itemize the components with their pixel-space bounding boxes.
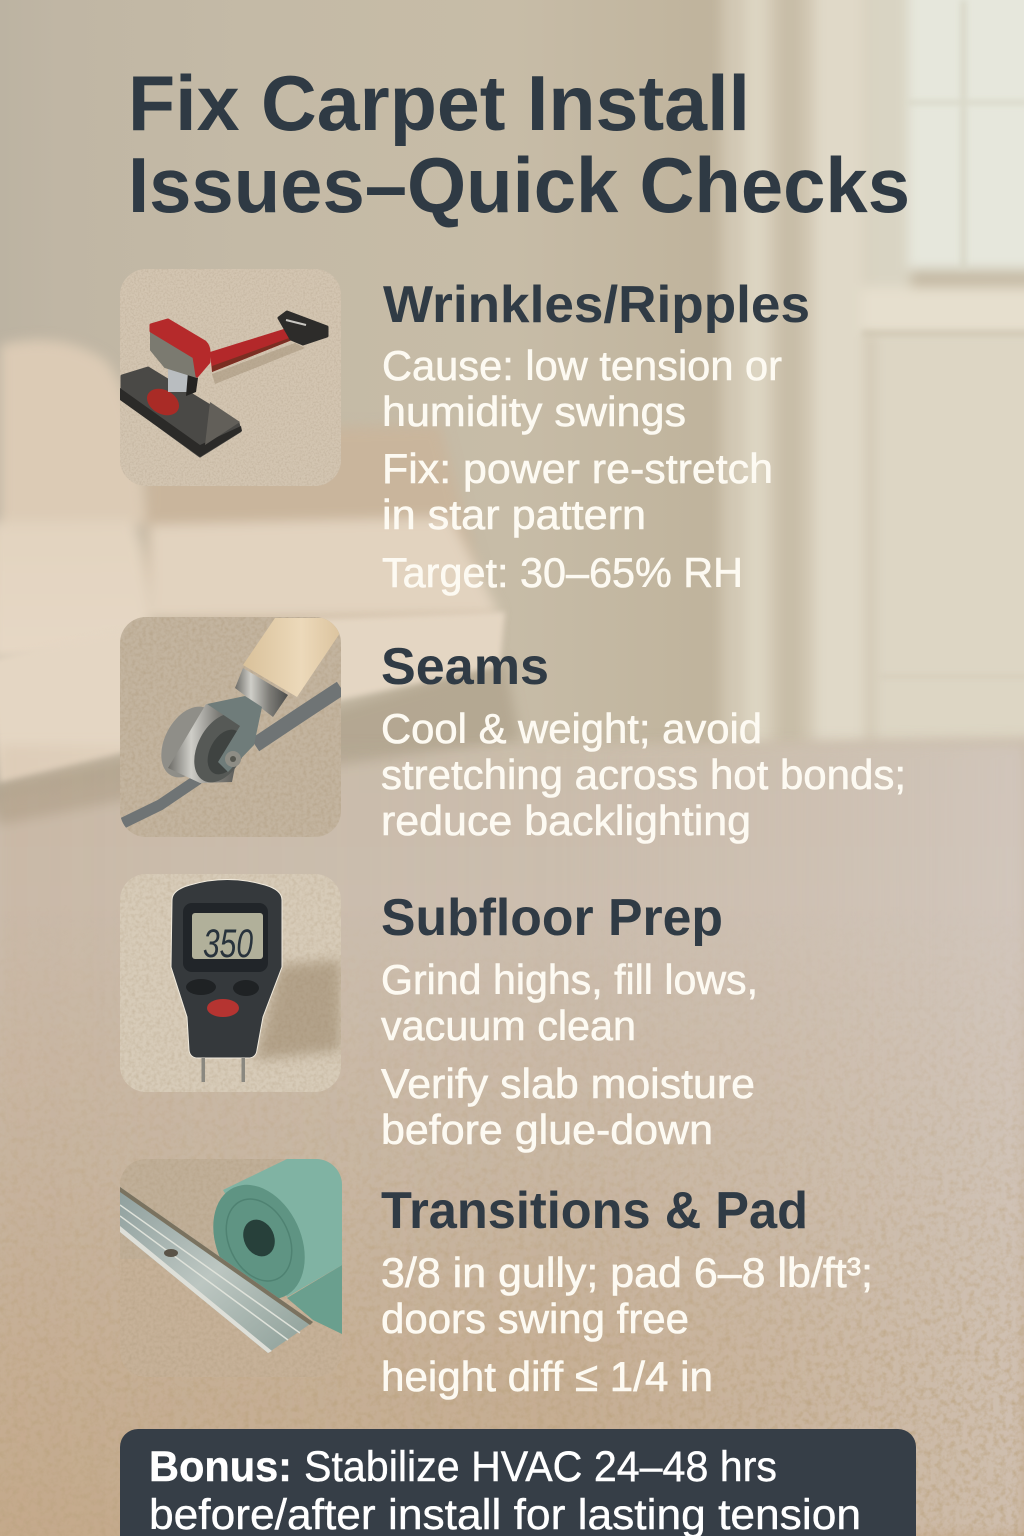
title: Issues–Quick Checks [128, 141, 910, 229]
text block: seams: Seams [381, 638, 549, 696]
text block: transitions and pad: height diff ≤ 1/4 in [381, 1353, 713, 1400]
text block: wrinkles and ripples: Cause: low tension or [382, 342, 782, 389]
text block: wrinkles and ripples: in star pattern [382, 491, 646, 538]
title: Fix Carpet Install [128, 59, 750, 147]
callout: bonus tip [120, 1429, 916, 1536]
text block: wrinkles and ripples: Wrinkles/Ripples [383, 276, 810, 334]
text block: wrinkles and ripples: humidity swings [382, 388, 686, 435]
text block: seams: stretching across hot bonds; [381, 751, 906, 798]
text block: subfloor prep: vacuum clean [381, 1002, 636, 1049]
text block: subfloor prep: before glue-down [381, 1106, 713, 1153]
text block: subfloor prep: Verify slab moisture [381, 1060, 755, 1107]
icon: seam roller [120, 617, 341, 837]
callout: bonus tip: Bonus: [149, 1443, 292, 1491]
text block: wrinkles and ripples [382, 276, 810, 596]
text block: transitions and pad: doors swing free [381, 1295, 689, 1342]
text block: wrinkles and ripples: Target: 30–65% RH [382, 549, 743, 596]
text block: subfloor prep: Subfloor Prep [381, 889, 723, 947]
text block: seams: reduce backlighting [381, 797, 751, 844]
icon: transition strip and pad roll [120, 1159, 344, 1377]
text block: subfloor prep [381, 889, 758, 1153]
meter reading: 350 [203, 922, 253, 966]
text block: transitions and pad: 3/8 in gully; pad 6–8 lb/ft³; [381, 1249, 873, 1296]
text block: seams: Cool & weight; avoid [381, 705, 762, 752]
text block: subfloor prep: Grind highs, fill lows, [381, 956, 758, 1003]
icon: carpet power stretcher [120, 269, 341, 486]
text block: transitions and pad [381, 1182, 873, 1400]
callout: bonus tip: Stabilize HVAC 24–48 hrs [304, 1443, 777, 1491]
text block: transitions and pad: Transitions & Pad [381, 1182, 808, 1240]
text block: wrinkles and ripples: Fix: power re-stretch [382, 445, 773, 492]
icon: moisture meter [120, 874, 341, 1092]
title [128, 59, 910, 229]
text block: seams [381, 638, 906, 844]
